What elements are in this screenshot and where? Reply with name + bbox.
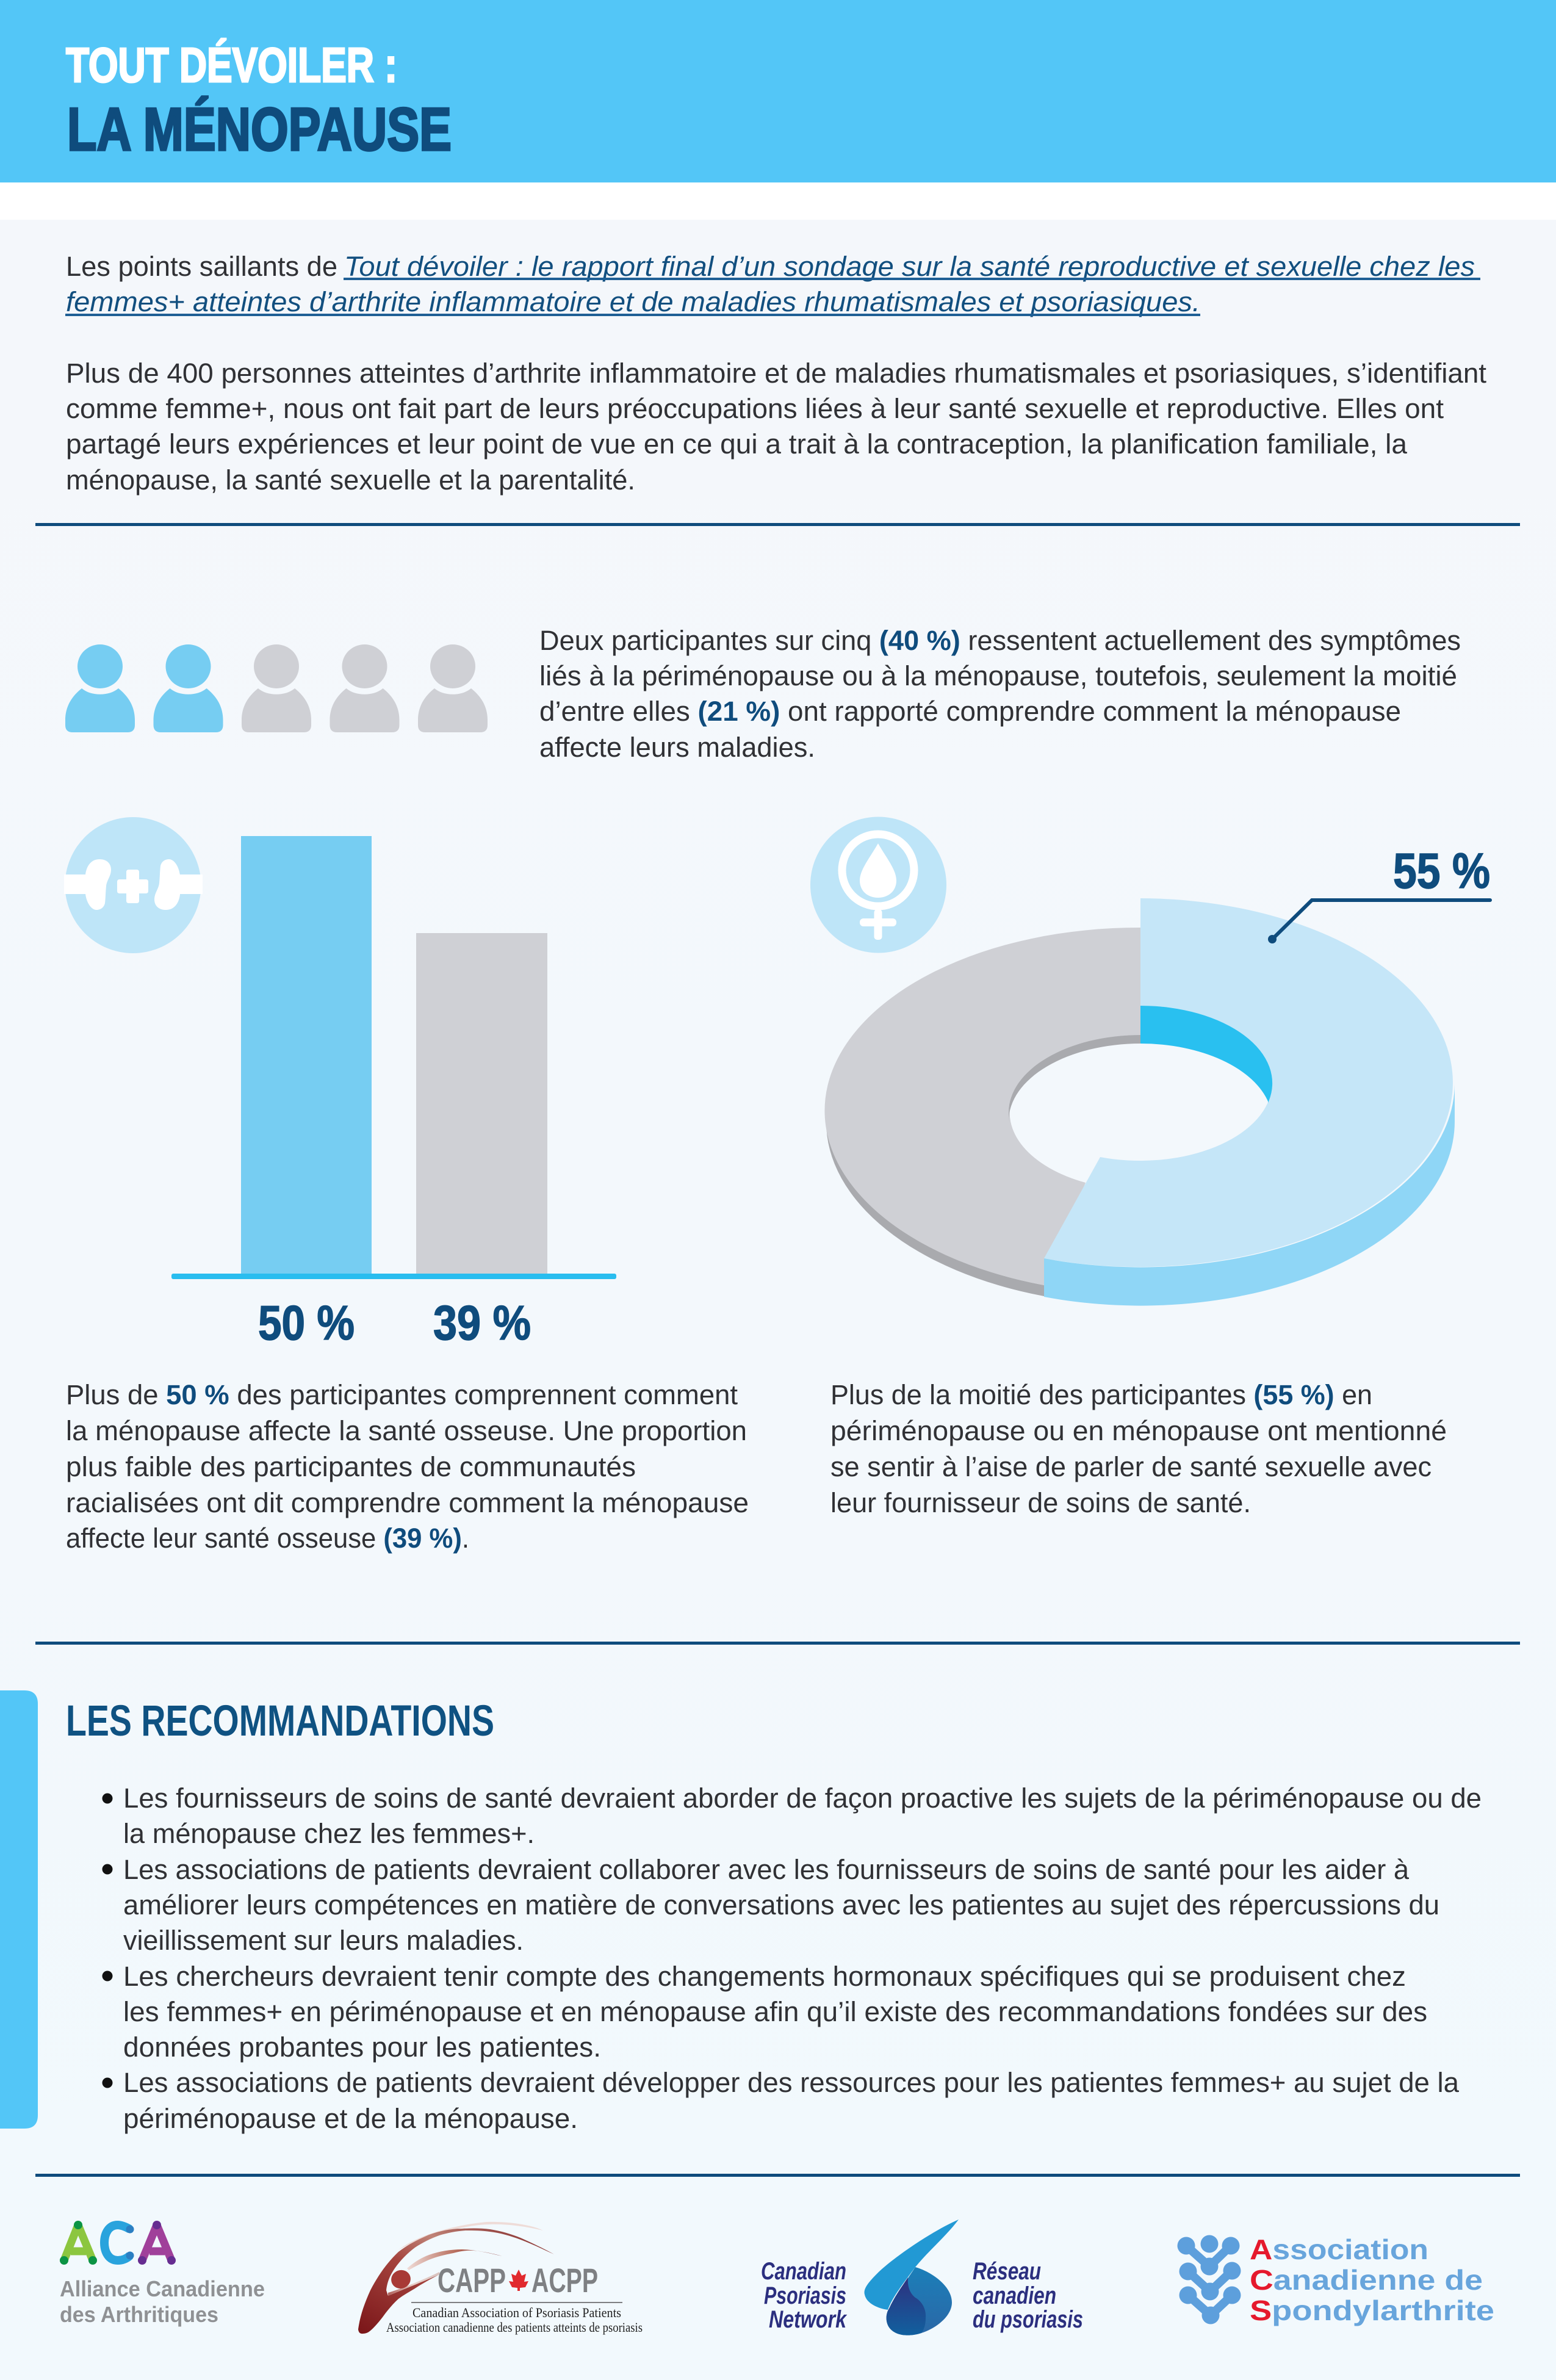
logo: Association Canadienne de Spondylarthrite [1178,2234,1494,2326]
grey slice [824,928,1140,1285]
logo: Canadian Psoriasis Network: Réseau [973,2258,1041,2285]
blue slice depth [1044,1083,1455,1306]
bullet 3 [103,1961,1427,2063]
header banner [0,0,1556,182]
bullet 2 [103,1854,1439,1956]
bullet 1 [103,1783,1482,1849]
bone health text: la ménopause affecte la santé osseuse. Une proportion [66,1415,747,1446]
axis [171,1274,616,1279]
value 50 %: 50 % [258,1296,355,1350]
recommendations heading: LES RECOMMANDATIONS [66,1697,494,1745]
grey inner wall [1009,1035,1140,1121]
symptoms statistic text: Deux participantes sur cinq (40 %) ressentent actuellement des symptômes [539,625,1461,656]
logo: Canadian Psoriasis Network [761,2220,1083,2335]
intro description paragraph: Plus de 400 personnes atteintes d’arthrite inflammatoire et de maladies rhumatismales et psoriasiques, s’identifiant [66,358,1486,389]
bullet 1: la ménopause chez les femmes+. [123,1818,535,1849]
bone health text: affecte leur santé osseuse (39 %). [66,1523,469,1554]
bone health text [66,1379,749,1554]
intro link paragraph [65,251,1480,317]
bullet 4: périménopause et de la ménopause. [123,2103,578,2134]
logo: Association Canadienne de Spondylarthrite: Canadienne de [1250,2264,1483,2296]
bone health text: Plus de 50 % des participantes comprennent comment [66,1379,738,1410]
bone health text: plus faible des participantes de communautés [66,1451,636,1482]
logo: Association Canadienne de Spondylarthrite: Association [1250,2234,1428,2265]
value 39 %: 39 % [433,1296,531,1350]
logo: Alliance Canadienne des Arthritiques: Alliance Canadienne [60,2276,265,2301]
symptoms statistic text [539,625,1461,763]
bullet 2: Les associations de patients devraient collaborer avec les fournisseurs de soins de santé pour les aider à [123,1854,1410,1885]
icon: bone health [64,817,203,953]
logo: Alliance Canadienne des Arthritiques: des Arthritiques [60,2302,218,2327]
symptoms statistic text: liés à la périménopause ou à la ménopause, toutefois, seulement la moitié [539,660,1457,691]
icon row: two of five people [65,644,488,732]
blue inner wall [1140,1006,1272,1103]
side tab [0,1690,38,2129]
bullet 3: données probantes pour les patientes. [123,2032,601,2063]
title line 2: LA MÉNOPAUSE [67,95,452,163]
comfort text: se sentir à l’aise de parler de santé sexuelle avec [830,1451,1432,1482]
logo: Alliance Canadienne des Arthritiques [60,2221,265,2327]
intro link paragraph: Les points saillants de [66,251,337,282]
logo: Canadian Psoriasis Network: Psoriasis [764,2282,846,2309]
bullet 1: Les fournisseurs de soins de santé devraient aborder de façon proactive les sujets de la périménopause ou de [123,1783,1482,1814]
intro description paragraph: ménopause, la santé sexuelle et la parentalité. [66,464,635,496]
symptoms statistic text: affecte leurs maladies. [539,732,815,763]
intro link paragraph: Tout dévoiler : le rapport final d’un sondage sur la santé reproductive et sexuelle chez les [344,251,1475,282]
bullet 3: Les chercheurs devraient tenir compte des changements hormonaux spécifiques qui se produisent chez [123,1961,1406,1992]
icon: female symbol with drop [810,817,946,953]
intro description paragraph [66,358,1486,496]
title line 1: TOUT DÉVOILER : [66,38,397,92]
logo: Canadian Psoriasis Network: du psoriasis [973,2306,1083,2333]
comfort text: Plus de la moitié des participantes (55 %) en [830,1379,1372,1410]
bar chart [171,836,616,1350]
logo: Association Canadienne de Spondylarthrite: Spondylarthrite [1250,2295,1494,2326]
logo: Canadian Psoriasis Network: Canadian [761,2258,846,2285]
logo: CAPP ACPP: Association canadienne des patients atteints de psoriasis [386,2320,643,2335]
logo: Canadian Psoriasis Network: canadien [973,2282,1056,2309]
logo: Canadian Psoriasis Network: Network [769,2306,847,2333]
comfort text [830,1379,1447,1518]
logo: CAPP ACPP: Canadian Association of Psoriasis Patients [412,2305,621,2320]
intro description paragraph: comme femme+, nous ont fait part de leurs préoccupations liées à leur santé sexuelle et reproductive. Elles ont [66,393,1444,424]
symptoms statistic text: d’entre elles (21 %) ont rapporté comprendre comment la ménopause [539,696,1401,727]
bar: 39 % [416,933,547,1274]
logo: CAPP ACPP: ACPP [531,2261,598,2299]
logo: CAPP ACPP: CAPP [438,2261,506,2299]
comfort text: leur fournisseur de soins de santé. [830,1487,1251,1518]
comfort text: périménopause ou en ménopause ont mentionné [830,1415,1447,1446]
bone health text: racialisées ont dit comprendre comment la ménopause [66,1487,749,1518]
intro link paragraph: femmes+ atteintes d’arthrite inflammatoire et de maladies rhumatismales et psoriasiques. [66,286,1200,317]
bullet 3: les femmes+ en périménopause et en ménopause afin qu’il existe des recommandations fondées sur des [123,1996,1427,2027]
intro description paragraph: partagé leurs expériences et leur point de vue en ce qui a trait à la contraception, la planification familiale, la [66,428,1408,460]
bullet 4 [103,2067,1460,2134]
grey slice depth [826,1111,1044,1296]
donut chart 55 % [824,843,1490,1306]
callout leader [1268,900,1490,943]
recommendations list [103,1783,1482,2134]
blue slice [1044,898,1453,1267]
bullet 2: améliorer leurs compétences en matière de conversations avec les patientes au sujet des répercussions du [123,1889,1439,1920]
bullet 2: vieillissement sur leurs maladies. [123,1925,524,1956]
logo: CAPP ACPP [358,2222,643,2335]
value 55 %: 55 % [1393,843,1490,899]
bullet 4: Les associations de patients devraient développer des ressources pour les patientes femmes+ au sujet de la [123,2067,1460,2098]
bar: 50 % [241,836,372,1274]
